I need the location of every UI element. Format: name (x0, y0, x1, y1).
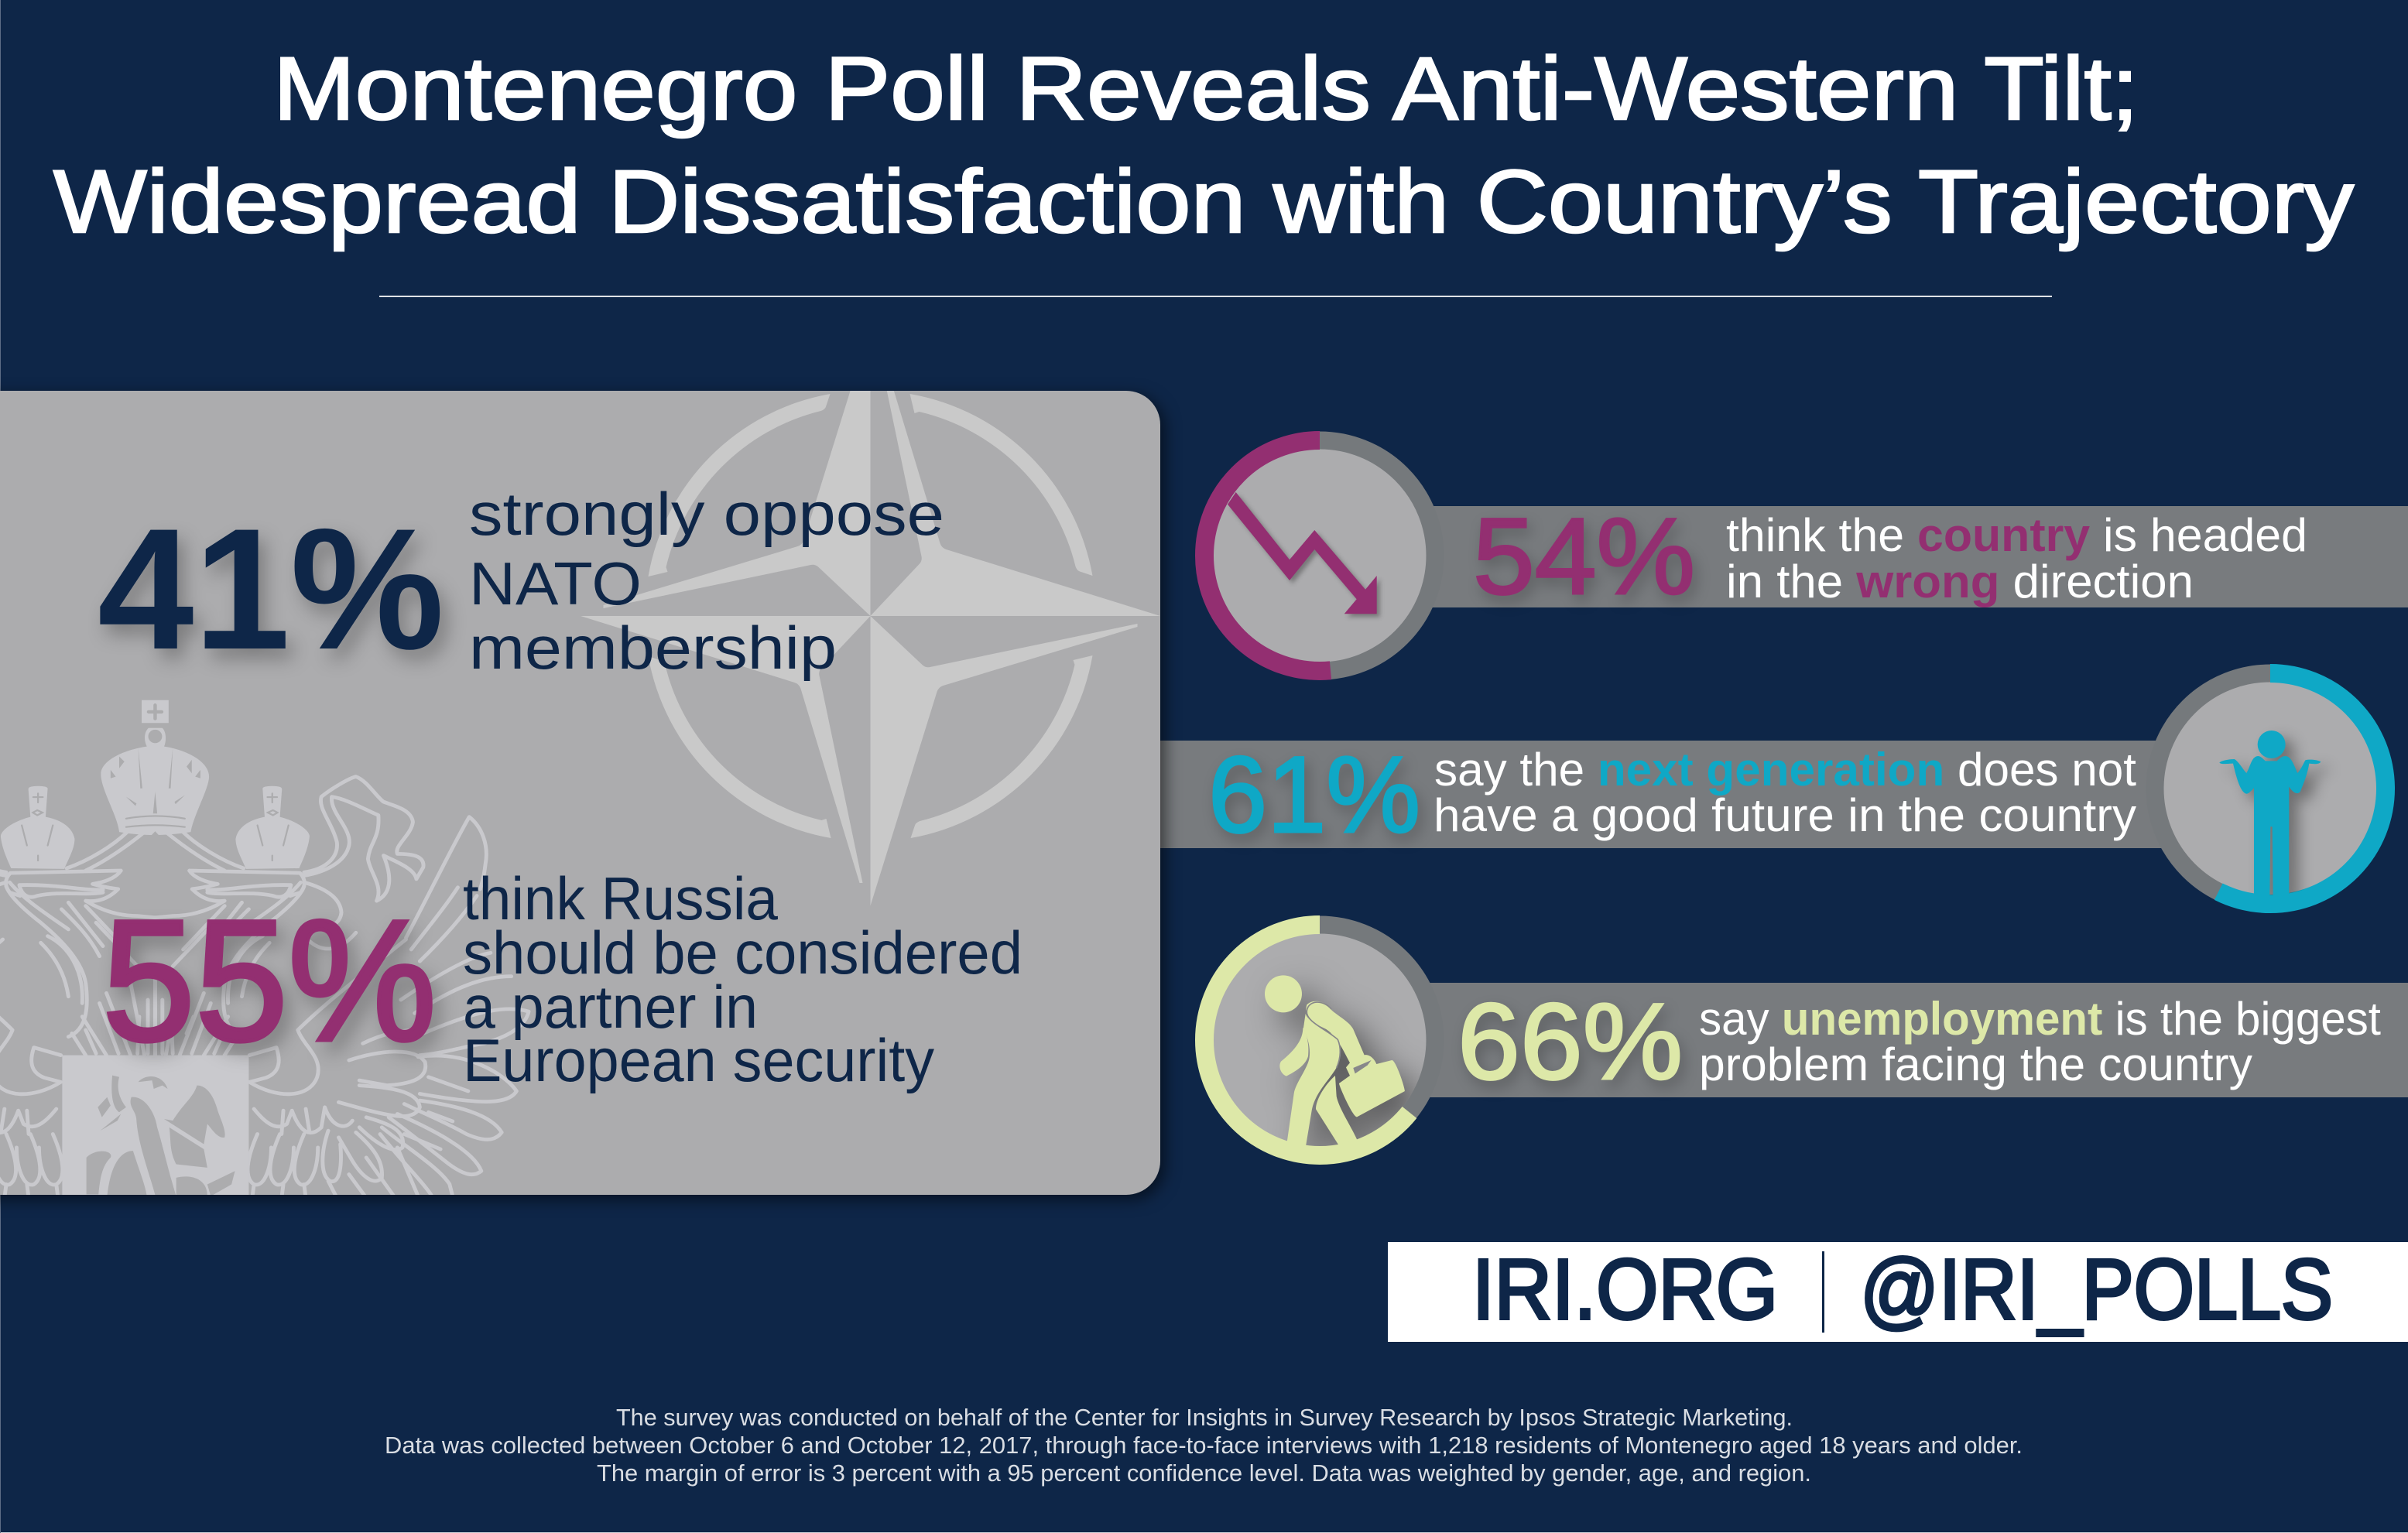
stat: 41 percent: 41% (98, 493, 444, 686)
stat: 55 percent: 55% (102, 885, 437, 1077)
panel: NATO and Russia opinions (0, 327, 1160, 1199)
text: think Russia should be considered a partner (463, 864, 1022, 1094)
chart: 66 percent donut with walking jobseeker (1204, 925, 1435, 1155)
bar: 54 percent (1316, 506, 2408, 607)
footnote: survey methodology: The survey was conducted on behalf of the Center for Insights in Survey Research by Ipsos Strategic Marketing. (616, 1404, 1793, 1431)
icon: eagle centre crown (101, 700, 209, 836)
stat: 66 percent: 66% (1457, 980, 1683, 1102)
icon: eagle shield with rider (62, 1056, 248, 1199)
bar: 66 percent (1316, 983, 2408, 1097)
callout: website and handle (1388, 1242, 2408, 1342)
icon: NATO compass star (581, 327, 1160, 905)
stat: 54 percent: 54% (1473, 495, 1695, 617)
text: unemployment (1699, 993, 2381, 1090)
icon: person walking with briefcase (1265, 975, 1405, 1148)
footnote: survey methodology (385, 1404, 2023, 1487)
title (53, 39, 2355, 252)
chart: 54 percent donut with falling arrow (1204, 440, 1435, 671)
title: Montenegro Poll Reveals Anti-Western Tilt; (273, 39, 2139, 139)
callout: website and handle: @IRI_POLLS (1860, 1242, 2333, 1337)
text: next generation: have a good future in the country (1433, 789, 2136, 841)
text: country wrong direction: think the country is headed (1726, 509, 2307, 561)
text: strongly oppose NATO membership: strongly oppose (469, 480, 944, 548)
text: strongly oppose NATO membership (469, 480, 944, 682)
chart: 61 percent donut with shrugging person (2155, 673, 2386, 904)
text: strongly oppose NATO membership: NATO (469, 549, 642, 618)
text: think Russia should be considered a partner: think Russia (463, 864, 779, 932)
footnote: survey methodology: The margin of error is 3 percent with a 95 percent confidence level. Data was weighted by gender, age, and region. (597, 1459, 1811, 1487)
bar: 61 percent (1146, 741, 2167, 848)
text: unemployment: problem facing the country (1699, 1039, 2252, 1090)
title: Widespread Dissatisfaction with Country’s Trajectory (53, 152, 2355, 252)
text: think Russia should be considered a partner: should be considered (463, 919, 1022, 987)
text: think Russia should be considered a partner: European security (463, 1026, 934, 1094)
icon: Russian double-headed eagle (0, 700, 529, 1199)
text: country wrong direction (1726, 509, 2307, 607)
callout: website and handle: IRI.ORG (1472, 1242, 1778, 1337)
icon: falling arrow (1228, 492, 1377, 614)
text: country wrong direction: in the wrong direction (1726, 556, 2194, 607)
text: next generation: say the next generation does not (1434, 744, 2136, 796)
text: strongly oppose NATO membership: membership (469, 614, 837, 682)
stat: 61 percent: 61% (1208, 734, 1420, 855)
text: next generation (1433, 744, 2136, 841)
text: unemployment: say unemployment is the biggest (1699, 993, 2381, 1045)
text: think Russia should be considered a partner: a partner in (463, 973, 758, 1041)
icon: shrugging person (2219, 731, 2321, 896)
footnote: survey methodology: Data was collected between October 6 and October 12, 2017, through face-to-face interviews with 1,218 residents of Montenegro aged 18 years and older. (385, 1432, 2023, 1459)
